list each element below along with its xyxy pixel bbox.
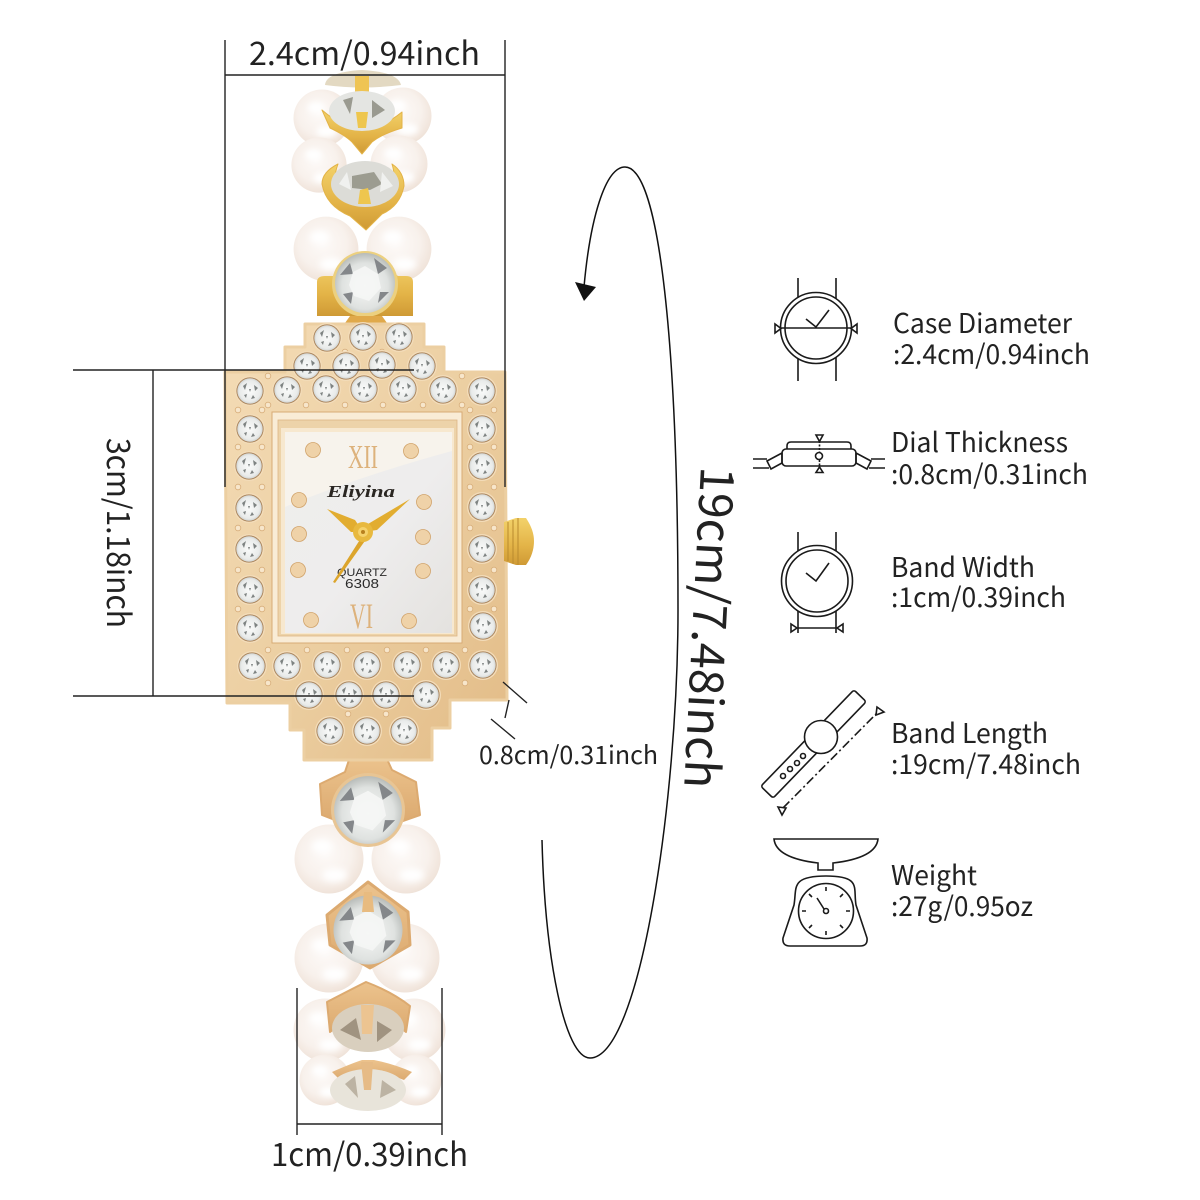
dimension: case width: 2.4cm/0.94inch	[249, 29, 480, 75]
upper bracelet	[291, 70, 432, 330]
numeral VI: VI	[350, 596, 373, 636]
dimension: case height: 3cm/1.18inch	[97, 438, 143, 628]
text: weight: :27g/0.95oz	[891, 885, 1033, 924]
icon: band length	[761, 690, 884, 815]
dimension: band width	[271, 988, 468, 1176]
watch hands	[327, 499, 410, 583]
crown	[504, 518, 534, 565]
hour markers	[290, 442, 432, 628]
text: band width: :1cm/0.39inch	[891, 576, 1066, 615]
text: weight: Weight	[891, 854, 977, 893]
dimension: case width	[225, 29, 505, 487]
icon: band width	[782, 532, 852, 633]
text: weight	[891, 854, 1033, 924]
numeral XII: XII	[348, 439, 378, 476]
dimension: band length: 19cm/7.48inch	[670, 465, 756, 790]
arrow: band length loop	[542, 167, 678, 1058]
watch case	[225, 322, 534, 760]
text: case diameter: Case Diameter	[893, 302, 1073, 341]
case beads	[235, 349, 497, 717]
text: band length: :19cm/7.48inch	[891, 743, 1081, 782]
text: case diameter: :2.4cm/0.94inch	[893, 333, 1090, 372]
text: band length: Band Length	[891, 712, 1048, 751]
text: band length	[891, 712, 1081, 782]
dial face	[285, 432, 452, 633]
dimension: case height	[73, 370, 414, 696]
watch photograph	[225, 70, 534, 1111]
text: dial thickness: :0.8cm/0.31inch	[891, 453, 1088, 492]
model number: 6308	[345, 576, 379, 591]
dial frame	[272, 412, 462, 643]
brand: Eliyina	[326, 482, 396, 501]
icon: weight scale	[774, 839, 878, 946]
text: case diameter	[893, 302, 1090, 372]
text: band width: Band Width	[891, 546, 1035, 585]
icon: case diameter	[775, 278, 857, 381]
lower bracelet	[294, 757, 446, 1111]
dimension: thickness	[479, 682, 658, 772]
quartz label: QUARTZ	[337, 567, 387, 579]
dimension: thickness: 0.8cm/0.31inch	[479, 736, 658, 772]
case stones	[234, 322, 498, 746]
dimension: band width: 1cm/0.39inch	[271, 1130, 468, 1176]
icon: dial thickness	[753, 435, 885, 472]
text: dial thickness	[891, 421, 1088, 492]
text: dial thickness: Dial Thickness	[891, 421, 1068, 460]
text: band width	[891, 546, 1066, 615]
